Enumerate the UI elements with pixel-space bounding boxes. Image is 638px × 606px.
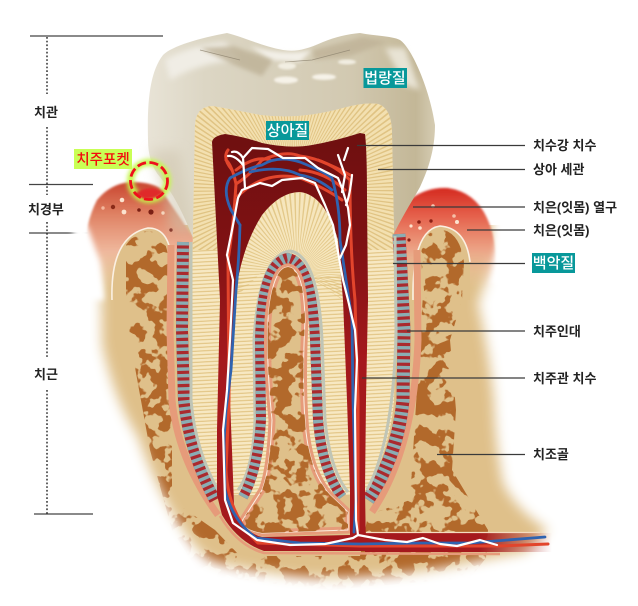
periodontal ligament and cementum [170,234,418,515]
tooth crown: enamel [148,33,435,238]
ligament: inner arch [243,258,342,497]
ligament: left outer [182,242,215,500]
vein [224,159,545,544]
상아질 label: 상아질 [267,122,308,140]
enamel: occlusal fissures [200,37,387,84]
bone base and cavities [90,220,570,595]
labels: left [28,105,64,382]
scale lines: crown, neck, root divisions [29,36,163,514]
cementum: left outer [170,245,218,515]
nerve [223,148,497,546]
gum speckles [101,198,459,242]
enamel: highlights [165,42,420,90]
법랑질 label: 법랑질 [364,70,406,87]
labels: left: 치근 [34,367,58,382]
cementum: right outer [372,250,418,512]
blood vessels and nerves [223,148,548,546]
gum outer fades [72,222,510,300]
labels: right [533,138,617,462]
inner arch dentin rays [237,192,343,300]
labels: right: 치수강 치수 [533,138,596,153]
gum: right [390,188,496,300]
dentin [185,100,400,500]
leader lines [357,146,525,454]
gum bone [111,225,471,300]
interradicular bone [236,262,354,534]
artery [226,150,548,546]
labels: left: 치관 [34,105,58,120]
labels: right: 치주관 치수 [533,371,596,386]
gum: left [85,182,195,300]
labels: right: 치은(잇몸) [533,223,590,238]
horizontal canal [365,533,552,552]
ligament: right outer [368,234,404,500]
labels: right: 치조골 [533,447,569,462]
치주포켓 marker: dashed circle [130,162,168,200]
치주포켓 label: 치주포켓 [76,152,130,168]
crown dentin rays [192,104,394,250]
cementum gray lines [191,236,396,492]
pulp cavity and root canals [212,133,552,554]
labels: right: 상아 세관 [533,162,584,177]
labels: right: 치주인대 [533,324,581,339]
jaw bone [72,182,570,595]
canal salmon edge [220,516,500,554]
백악질 label: 백악질 [533,255,574,272]
labels: left: 치경부 [28,202,64,217]
cementum: inner arch [238,251,348,492]
labels: right: 치은(잇몸) 열구 [533,200,617,215]
root dentin grain [185,235,400,500]
